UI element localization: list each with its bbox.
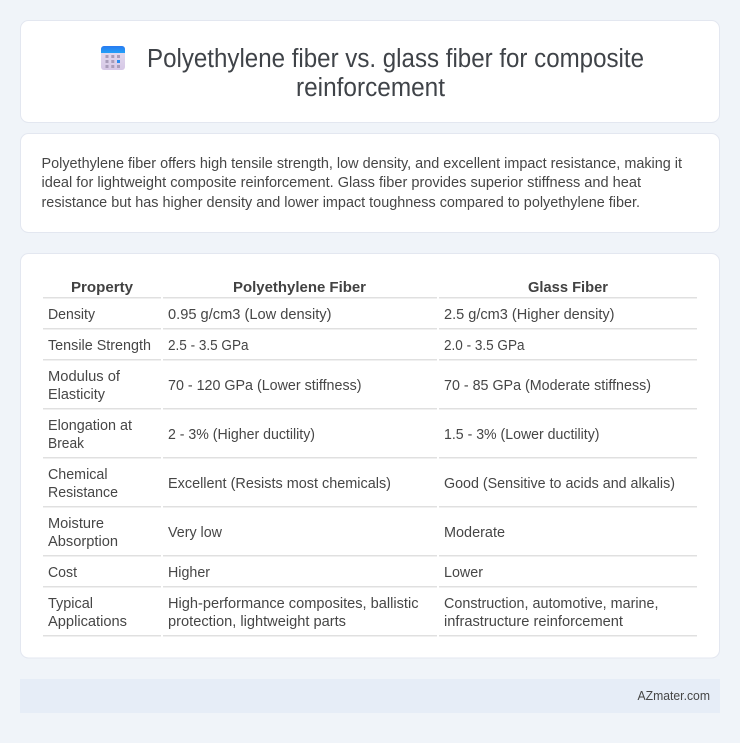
row: chemical resistance: Excellent (Resists most chemicals) bbox=[168, 476, 391, 492]
title bbox=[147, 45, 644, 102]
row: typical applications: infrastructure reinforcement bbox=[444, 614, 623, 630]
row: moisture absorption: Moderate bbox=[444, 525, 505, 541]
row: moisture absorption: Moisture bbox=[48, 516, 104, 532]
panel: title card bbox=[20, 20, 720, 122]
row: modulus of elasticity: 70 - 85 GPa (Moderate stiffness) bbox=[444, 378, 651, 394]
row: density bbox=[48, 307, 615, 323]
summary paragraph: Polyethylene fiber offers high tensile strength, low density, and excellent impact resistance, making it bbox=[42, 156, 682, 172]
row: typical applications: High-performance composites, ballistic bbox=[168, 596, 419, 612]
row: moisture absorption: Absorption bbox=[48, 534, 118, 550]
row: elongation at break bbox=[48, 418, 600, 452]
table header: Property bbox=[71, 279, 134, 296]
summary paragraph: ideal for lightweight composite reinforcement. Glass fiber provides superior stiffness and heat bbox=[42, 175, 641, 191]
footer credit: AZmater.com bbox=[638, 688, 710, 703]
row: cost: Higher bbox=[168, 565, 210, 581]
row: chemical resistance: Resistance bbox=[48, 485, 118, 501]
table header bbox=[71, 279, 608, 296]
row: cost: Cost bbox=[48, 565, 77, 581]
summary paragraph bbox=[42, 156, 682, 211]
row: typical applications: Typical bbox=[48, 596, 93, 612]
row: elongation at break: Elongation at bbox=[48, 418, 132, 434]
row: moisture absorption: Very low bbox=[168, 525, 222, 541]
row: elongation at break: 2 - 3% (Higher ductility) bbox=[168, 427, 315, 443]
row: typical applications: protection, lightweight parts bbox=[168, 614, 346, 630]
row: tensile strength: 2.0 - 3.5 GPa bbox=[444, 338, 525, 354]
row: modulus of elasticity bbox=[48, 369, 651, 403]
row: chemical resistance bbox=[48, 467, 675, 501]
summary paragraph: resistance but has higher density and lower impact toughness compared to polyethylene fiber. bbox=[42, 195, 640, 211]
row: tensile strength: Tensile Strength bbox=[48, 338, 151, 354]
icon: calendar bbox=[101, 46, 125, 70]
row: chemical resistance: Chemical bbox=[48, 467, 108, 483]
panel: summary text bbox=[20, 134, 720, 232]
row: modulus of elasticity: 70 - 120 GPa (Lower stiffness) bbox=[168, 378, 362, 394]
row: typical applications bbox=[48, 596, 658, 630]
row: typical applications: Applications bbox=[48, 614, 127, 630]
row: elongation at break: Break bbox=[48, 436, 85, 452]
table header: Polyethylene Fiber bbox=[233, 279, 366, 296]
title: Polyethylene fiber vs. glass fiber for composite bbox=[147, 45, 644, 73]
row: tensile strength: 2.5 - 3.5 GPa bbox=[168, 338, 249, 354]
row: chemical resistance: Good (Sensitive to acids and alkalis) bbox=[444, 476, 675, 492]
title: reinforcement bbox=[296, 74, 445, 102]
footer bar bbox=[20, 679, 720, 713]
row: density: 0.95 g/cm3 (Low density) bbox=[168, 307, 332, 323]
panel: comparison table bbox=[20, 254, 720, 658]
table header: Glass Fiber bbox=[528, 279, 608, 296]
row: density: Density bbox=[48, 307, 96, 323]
row: cost: Lower bbox=[444, 565, 483, 581]
row: density: 2.5 g/cm3 (Higher density) bbox=[444, 307, 615, 323]
row: elongation at break: 1.5 - 3% (Lower ductility) bbox=[444, 427, 600, 443]
row: typical applications: Construction, automotive, marine, bbox=[444, 596, 658, 612]
row: cost bbox=[48, 565, 483, 581]
row: tensile strength bbox=[48, 338, 525, 354]
row: modulus of elasticity: Modulus of bbox=[48, 369, 121, 385]
row: modulus of elasticity: Elasticity bbox=[48, 387, 106, 403]
row: moisture absorption bbox=[48, 516, 505, 550]
